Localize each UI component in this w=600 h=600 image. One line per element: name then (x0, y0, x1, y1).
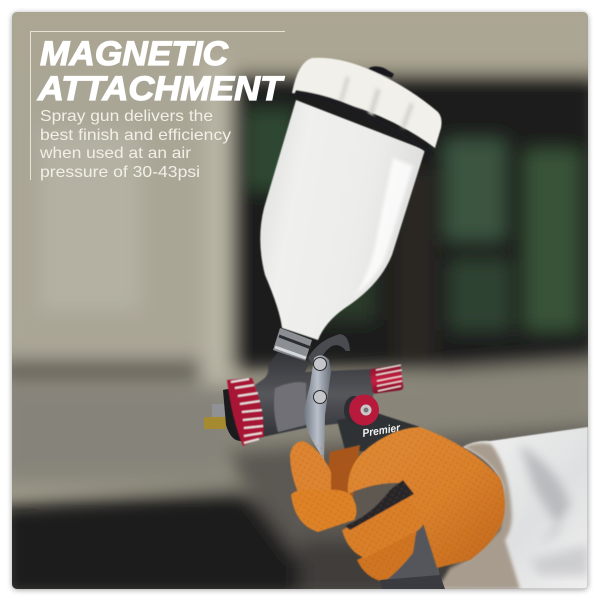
icon: paint cup (260, 100, 425, 340)
icon: white sleeve (437, 427, 588, 589)
icon: rear red knob (369, 365, 404, 394)
heading: ATTACHMENT (37, 70, 285, 108)
icon: orange glove (290, 427, 505, 582)
icon: cup connector (273, 328, 312, 362)
body text: best finish and efficiency (40, 127, 231, 144)
body text: Spray gun delivers the (40, 108, 213, 125)
text block frame (30, 32, 285, 180)
icon: cup lid (292, 58, 442, 155)
body text: when used at an air (39, 145, 192, 162)
heading: MAGNETIC (40, 35, 228, 73)
icon: spray nozzle (204, 389, 242, 441)
icon: silver trigger (304, 355, 331, 470)
icon: handle base (380, 575, 445, 589)
icon: centre red knob (344, 394, 379, 426)
icon: gun handle (387, 526, 440, 580)
brand label: Premier (362, 422, 402, 440)
icon: trigger hook (308, 334, 350, 365)
icon: red front ring (227, 378, 264, 446)
icon: spray gun body (255, 352, 420, 452)
body text: pressure of 30-43psi (40, 164, 200, 181)
